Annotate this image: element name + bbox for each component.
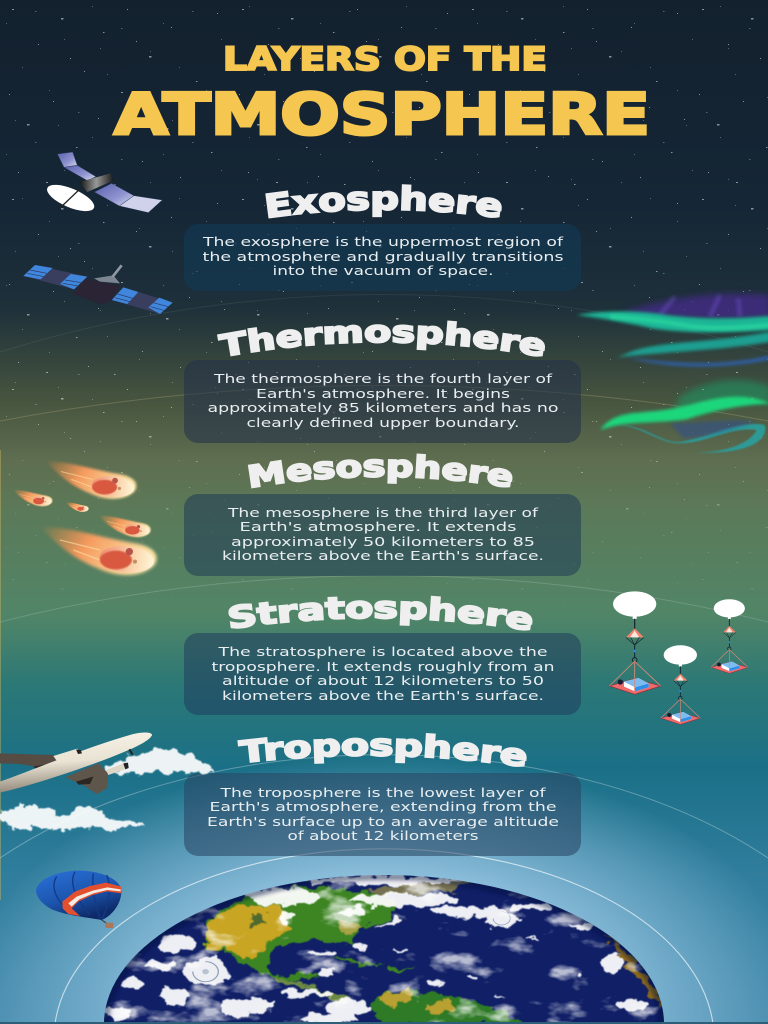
icon: weather balloons bbox=[609, 591, 748, 725]
stratosphere heading: Stratosphere bbox=[228, 596, 532, 631]
stratosphere description: kilometers above the Earth's surface. bbox=[222, 688, 544, 703]
stratosphere description: troposphere. It extends roughly from an bbox=[212, 659, 554, 674]
title line: atmosphere: ATMOSPHERE bbox=[114, 82, 650, 148]
limb shading bbox=[106, 877, 662, 1024]
icon: hot air balloon bbox=[36, 871, 121, 928]
thermosphere description: approximately 85 kilometers and has no bbox=[208, 400, 559, 415]
stratosphere text box bbox=[184, 633, 581, 715]
mesosphere description bbox=[222, 505, 544, 563]
icon: satellite with blue panels bbox=[23, 265, 173, 314]
thermosphere description: The thermosphere is the fourth layer of bbox=[213, 371, 553, 386]
mesosphere text box bbox=[184, 494, 581, 576]
icon: earth globe bbox=[104, 875, 664, 1024]
mesosphere description: approximately 50 kilometers to 85 bbox=[231, 534, 535, 549]
icon: satellite with white dish bbox=[44, 152, 162, 216]
atmosphere layer rings bbox=[0, 295, 768, 1024]
land masses bbox=[206, 878, 664, 1023]
troposphere description: of about 12 kilometers bbox=[288, 828, 478, 843]
title bbox=[114, 40, 650, 148]
panel: mesosphere bbox=[184, 454, 581, 576]
exosphere heading: Exosphere bbox=[265, 184, 502, 218]
panel: troposphere bbox=[184, 733, 581, 856]
panel: stratosphere bbox=[184, 596, 581, 715]
mesosphere description: kilometers above the Earth's surface. bbox=[222, 548, 544, 563]
thermosphere description: Earth's atmosphere. It begins bbox=[256, 386, 510, 401]
thermosphere description: clearly defined upper boundary. bbox=[246, 415, 520, 430]
exosphere text box bbox=[184, 224, 581, 291]
stratosphere description bbox=[212, 644, 554, 703]
starfield bbox=[6, 6, 768, 612]
exosphere description: the atmosphere and gradually transitions bbox=[202, 249, 564, 264]
hurricane eyes bbox=[193, 912, 510, 982]
panel: exosphere bbox=[184, 184, 581, 291]
exosphere description: The exosphere is the uppermost region of bbox=[202, 234, 564, 249]
mesosphere description: Earth's atmosphere. It extends bbox=[240, 519, 516, 534]
scattered cloud texture bbox=[104, 875, 664, 1024]
mesosphere description: The mesosphere is the third layer of bbox=[227, 505, 539, 520]
stratosphere description: The stratosphere is located above the bbox=[217, 644, 548, 659]
title line: layers of the: LAYERS OF THE bbox=[223, 40, 547, 78]
troposphere text box bbox=[184, 773, 581, 856]
troposphere heading: Troposphere bbox=[237, 733, 527, 767]
exosphere description bbox=[202, 234, 564, 278]
cloud systems bbox=[108, 877, 649, 1023]
icon: aurora bbox=[577, 294, 768, 453]
mesosphere heading: Mesosphere bbox=[248, 454, 512, 488]
icon: clouds bbox=[0, 749, 216, 829]
troposphere description: The troposphere is the lowest layer of bbox=[219, 785, 546, 800]
thermosphere heading: Thermosphere bbox=[217, 320, 546, 357]
thermosphere text box bbox=[184, 360, 581, 443]
troposphere description: Earth's atmosphere, extending from the bbox=[210, 799, 557, 814]
troposphere description bbox=[207, 785, 559, 843]
icon: airplane bbox=[0, 732, 152, 794]
stratosphere description: altitude of about 12 kilometers to 50 bbox=[222, 673, 544, 688]
exosphere description: into the vacuum of space. bbox=[272, 263, 494, 278]
panel: thermosphere bbox=[184, 320, 581, 443]
thermosphere description bbox=[208, 371, 559, 430]
troposphere description: Earth's surface up to an average altitude bbox=[207, 814, 559, 829]
icon: meteors bbox=[13, 462, 157, 575]
